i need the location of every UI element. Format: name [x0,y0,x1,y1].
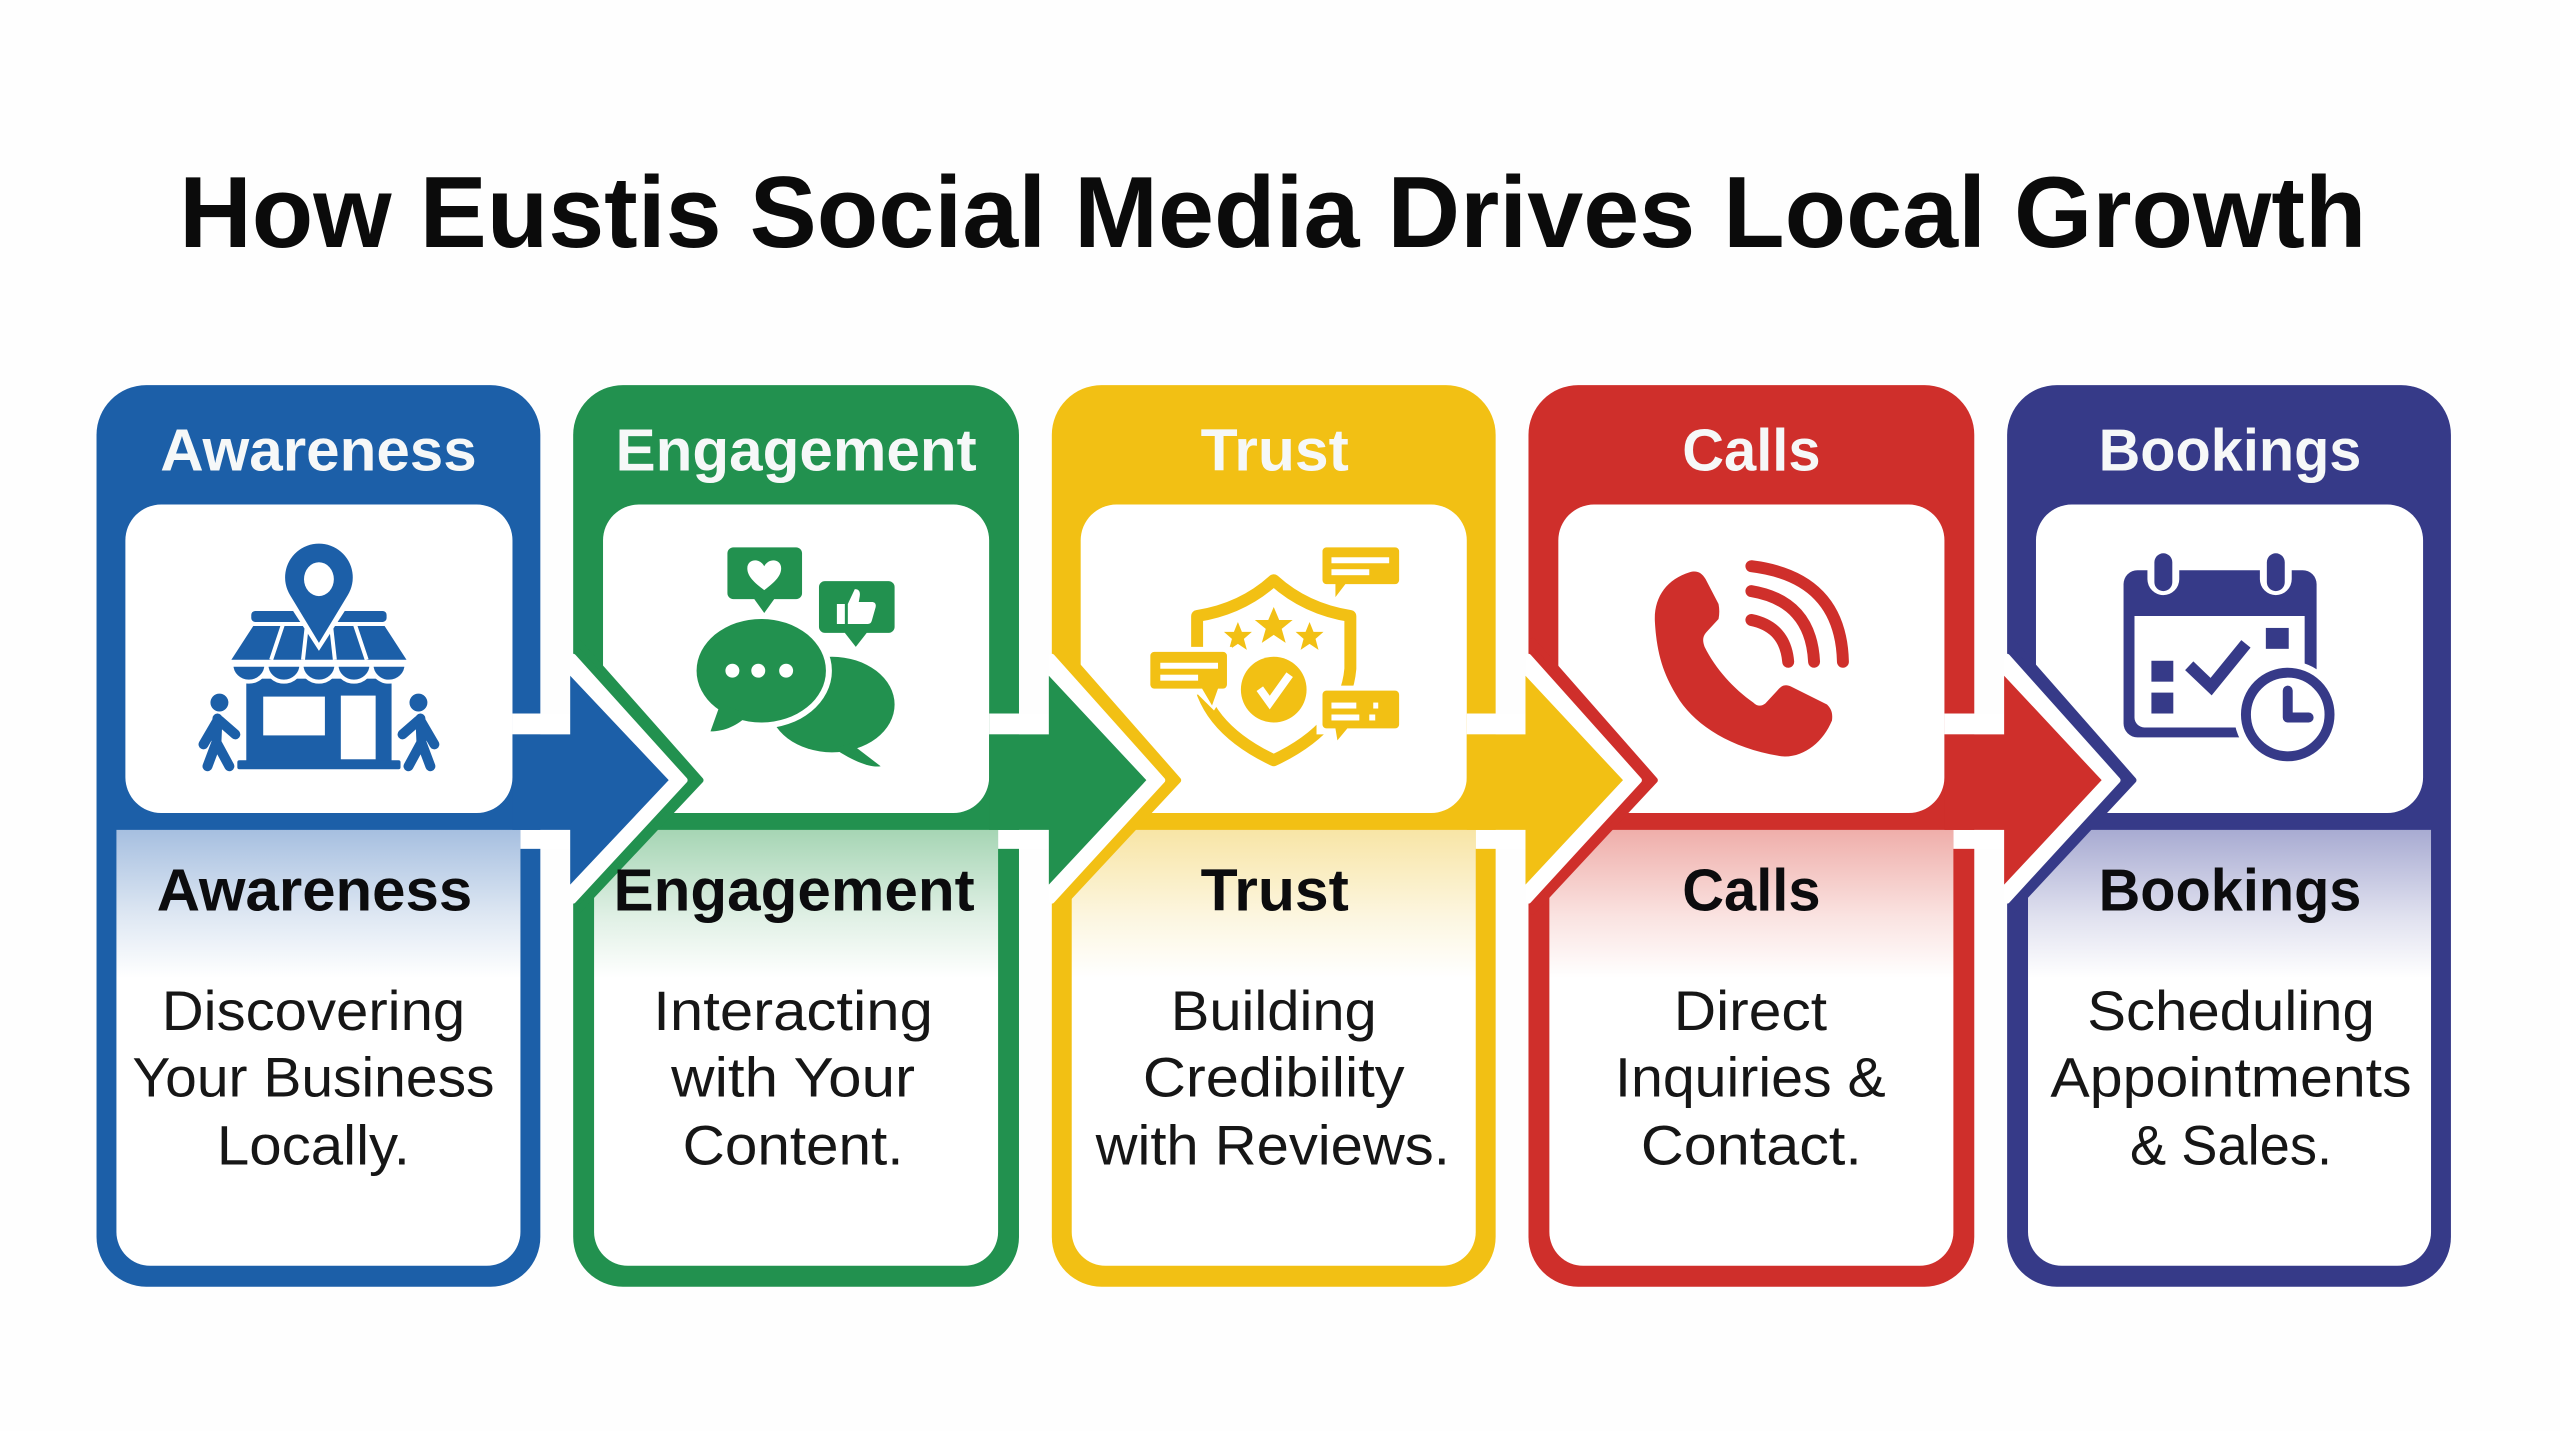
header: Trust: Trust [1201,417,1349,484]
title: How Eustis Social Media Drives Local Growth [179,155,2366,269]
arrow: Trust to Calls [1467,657,1639,901]
label: Awareness: Awareness [157,857,472,924]
label: Calls: Calls [1682,857,1821,924]
text box: Trust [1072,830,1476,1266]
description: Calls: Contact. [1641,1114,1862,1176]
description: Engagement: Content. [683,1114,904,1176]
description: Calls [1615,980,1886,1176]
description: Trust: Building [1171,980,1377,1042]
description: Awareness: Discovering [162,980,465,1042]
icon box: Awareness [125,505,512,813]
icon: shield with stars and review bubbles [1144,544,1403,760]
icon box: Engagement [603,505,989,813]
icon box: Bookings [2036,505,2423,813]
description: Trust [1095,980,1450,1176]
text box: Calls [1549,830,1953,1266]
description: Bookings: Scheduling [2087,980,2375,1042]
description: Engagement: Interacting [653,980,933,1042]
icon: phone handset with signal waves [1655,566,1843,756]
label: Bookings: Bookings [2099,857,2361,924]
description: Engagement [653,980,933,1176]
chevron band: Engagement [577,641,701,912]
header: Bookings: Bookings [2099,417,2361,484]
description: Calls: Direct [1674,980,1828,1042]
text box: Awareness [116,830,520,1266]
icon: storefront with pin and people [203,544,434,769]
chevron band: Trust [1056,641,1178,912]
description: Trust: Credibility [1143,1047,1405,1109]
arrow: Awareness to Engagement [512,657,685,901]
panel: Engagement [573,385,1019,1287]
icon: chat bubbles with heart and thumbs up [691,547,895,767]
chevron band: Calls [1532,641,1655,912]
text box: Bookings [2028,830,2431,1266]
header: Calls: Calls [1682,417,1821,484]
description: Awareness: Your Business [132,1047,495,1109]
panel: Trust [1052,385,1496,1287]
icon box: Trust [1081,505,1467,813]
text box: Engagement [594,830,998,1266]
panel: Awareness [97,385,540,1287]
description: Awareness [132,980,495,1176]
description: Engagement: with Your [670,1047,915,1109]
panel: Calls [1528,385,1974,1287]
label: Engagement: Engagement [613,857,975,924]
description: Calls: Inquiries & [1615,1047,1886,1109]
header: Engagement: Engagement [615,417,977,484]
header: Awareness: Awareness [160,417,477,484]
description: Bookings: Appointments [2050,1047,2412,1109]
description: Awareness: Locally. [217,1114,410,1176]
panel: Bookings [2007,385,2451,1287]
icon box: Calls [1558,505,1944,813]
arrow: Calls to Bookings [1944,657,2118,901]
arrow: Engagement to Trust [989,657,1162,901]
description: Bookings: & Sales. [2130,1114,2332,1176]
description: Trust: with Reviews. [1095,1114,1450,1176]
icon: calendar with check and clock [2124,549,2341,768]
description: Bookings [2050,980,2412,1176]
label: Trust: Trust [1201,857,1349,924]
chevron band: Bookings [2011,641,2133,912]
